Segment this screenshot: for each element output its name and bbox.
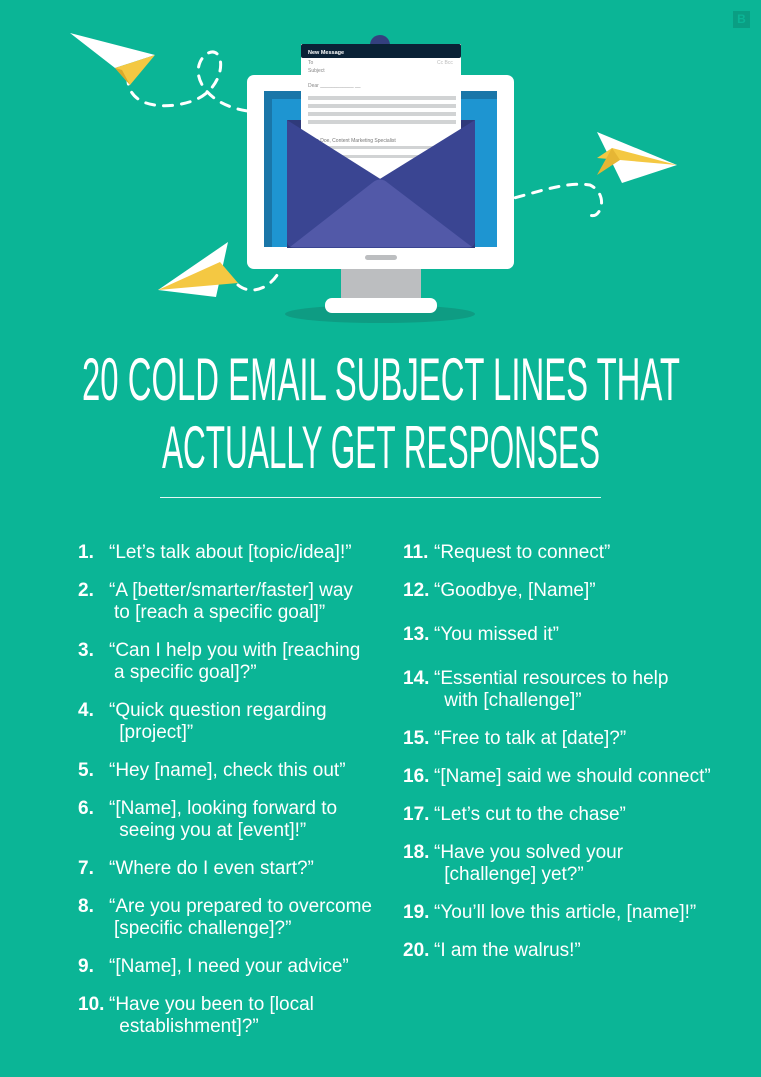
dashed trails — [128, 52, 602, 290]
list: right column: “Goodbye, [Name]” — [434, 580, 596, 601]
list: right column: “You’ll love this article, [name]!” — [434, 902, 696, 923]
list: right column: “Free to talk at [date]?” — [434, 728, 626, 749]
list: right column — [403, 542, 711, 961]
list: left column: to [reach a specific goal]” — [114, 602, 325, 623]
logo badge — [733, 11, 750, 28]
list: left column: [project]” — [119, 722, 193, 743]
list: left column: 10. — [78, 994, 104, 1015]
list: right column: 13. — [403, 624, 429, 645]
illustration: computer with email: John Doe, Content Marketing Specialist — [308, 138, 396, 144]
list: right column: 19. — [403, 902, 429, 923]
list: right column: “You missed it” — [434, 624, 559, 645]
list: left column: establishment]?” — [119, 1016, 259, 1037]
plane top-left — [70, 33, 155, 85]
list: right column: 14. — [403, 668, 429, 689]
plane bottom-left — [158, 242, 238, 297]
list: right column: 15. — [403, 728, 429, 749]
stand — [341, 266, 421, 300]
list: right column: 16. — [403, 766, 429, 787]
list: left column: 3. — [78, 640, 94, 661]
illustration: computer with email: New Message — [308, 50, 344, 56]
logo badge: B — [737, 12, 746, 26]
list: right column: “I am the walrus!” — [434, 940, 581, 961]
list: right column: 18. — [403, 842, 429, 863]
list: right column: “Let’s cut to the chase” — [434, 804, 626, 825]
list: left column: 6. — [78, 798, 94, 819]
list: left column: 1. — [78, 542, 94, 563]
list: left column: a specific goal]?” — [114, 662, 257, 683]
illustration: computer with email — [70, 33, 677, 323]
list: left column: “Can I help you with [reaching — [109, 640, 360, 661]
list: left column: “Have you been to [local — [109, 994, 314, 1015]
list: left column: “Where do I even start?” — [109, 858, 314, 879]
list: right column: 11. — [403, 542, 428, 563]
list: right column: “Essential resources to help — [434, 668, 668, 689]
list: right column: 12. — [403, 580, 429, 601]
list: left column: 5. — [78, 760, 94, 781]
divider — [160, 497, 601, 498]
list: left column: 4. — [78, 700, 94, 721]
list: right column: “Request to connect” — [434, 542, 610, 563]
list: right column: with [challenge]” — [444, 690, 582, 711]
list: left column: “[Name], looking forward to — [109, 798, 337, 819]
list: right column: 17. — [403, 804, 429, 825]
list: left column: “Let’s talk about [topic/idea]!” — [109, 542, 352, 563]
list: left column: [specific challenge]?” — [114, 918, 291, 939]
list: left column: “Hey [name], check this out” — [109, 760, 346, 781]
list: right column: [challenge] yet?” — [444, 864, 584, 885]
list: left column: “[Name], I need your advice” — [109, 956, 349, 977]
illustration: computer with email: Cc Bcc — [437, 60, 453, 66]
list: right column: “[Name] said we should connect” — [434, 766, 711, 787]
list: left column: “Are you prepared to overcome — [109, 896, 372, 917]
list: left column: 7. — [78, 858, 94, 879]
title — [82, 346, 680, 468]
list: left column: 2. — [78, 580, 94, 601]
monitor — [247, 75, 514, 269]
list: left column — [78, 542, 372, 1037]
illustration: computer with email: To — [308, 60, 314, 66]
envelope flaps — [287, 120, 390, 248]
list: right column: “Have you solved your — [434, 842, 623, 863]
list: right column: 20. — [403, 940, 429, 961]
illustration: computer with email: Dear ____________ __ — [308, 83, 361, 89]
list: left column: “A [better/smarter/faster] way — [109, 580, 353, 601]
list: left column: 8. — [78, 896, 94, 917]
list: left column: seeing you at [event]!” — [119, 820, 306, 841]
envelope back — [370, 35, 390, 55]
letter — [301, 44, 461, 194]
plane right — [597, 132, 677, 183]
shadow — [285, 305, 475, 323]
list: left column: 9. — [78, 956, 94, 977]
list: left column: “Quick question regarding — [109, 700, 327, 721]
illustration: computer with email: Subject — [308, 68, 325, 74]
